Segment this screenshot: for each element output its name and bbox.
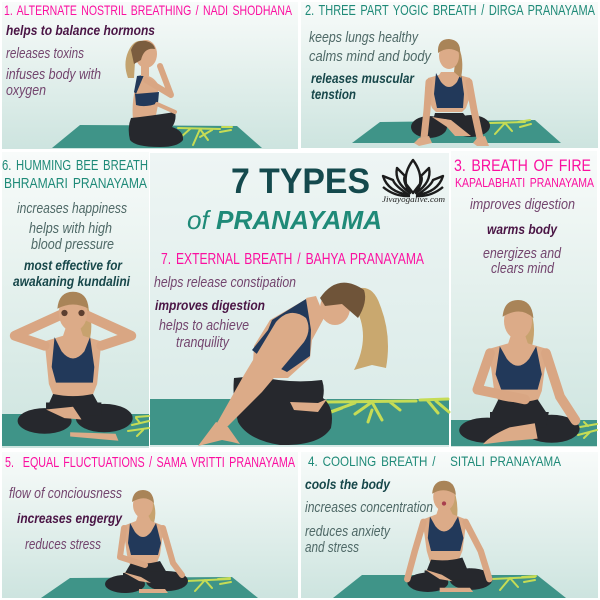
benefit: muscular tension: releases muscular: [311, 70, 415, 86]
yoga mat: [150, 399, 449, 445]
figure: seated, hand on belly: [459, 300, 580, 444]
heading: 5. EQUAL FLUCTUATIONS / SAMA VRITTI PRANAYAMA: [5, 454, 295, 471]
yoga mat: [451, 420, 597, 446]
benefit: digestion: improves digestion: [155, 297, 265, 313]
benefit: toxins: releases toxins: [6, 46, 84, 62]
figure: seated, hands over eyes: [15, 292, 133, 441]
heading: BHRAMARI PRANAYAMA: [4, 175, 147, 192]
heading: 6. HUMMING BEE BREATH: [2, 157, 148, 174]
benefit: lungs: keeps lungs healthy: [309, 30, 419, 46]
benefit: stress: reduces stress: [25, 537, 101, 553]
benefit: oxygen: oxygen: [6, 83, 46, 99]
panel: 2 three part yogic breath: [301, 2, 598, 148]
benefit: blood pressure: helps with high: [29, 221, 112, 237]
benefit: consciousness: flow of conciousness: [9, 486, 122, 502]
benefit: tranquility: helps to achieve: [159, 318, 249, 334]
benefit: constipation: helps release constipation: [154, 275, 296, 291]
benefit: energizes: clears mind: [491, 261, 555, 277]
benefit: anxiety: reduces anxiety: [305, 524, 391, 540]
panel: centre, 7 external breath: [150, 153, 449, 447]
heading: 7. EXTERNAL BREATH / BAHYA PRANAYAMA: [161, 251, 425, 268]
benefit: oxygen: [6, 67, 101, 99]
heading: [454, 156, 595, 190]
panel: 1 alternate nostril breathing: [2, 2, 298, 149]
panel: 5 equal fluctuations: [2, 452, 298, 598]
heading: 1. ALTERNATE NOSTRIL BREATHING / NADI SHODHANA: [4, 2, 292, 18]
benefit: oxygen: infuses body with: [6, 67, 101, 83]
benefit: energizes: [483, 246, 562, 277]
benefit: warms body: warms body: [487, 221, 558, 237]
benefit: concentration: increases concentration: [305, 500, 433, 516]
logo: website: Jivayogalive.com: [382, 194, 445, 204]
benefit: anxiety: [305, 524, 391, 556]
benefit: blood pressure: blood pressure: [31, 237, 114, 253]
yoga mat: [2, 414, 149, 446]
panel: 3 breath of fire: [451, 151, 597, 447]
benefit: tranquility: tranquility: [176, 335, 230, 351]
figure: external breath, bowed forward: [198, 283, 388, 446]
yoga mat: [52, 125, 262, 148]
figure: seated, cooling breath: [407, 481, 493, 592]
benefit: happiness: increases happiness: [17, 201, 127, 217]
benefit: calm: calms mind and body: [309, 49, 432, 65]
benefit: muscular tension: tenstion: [311, 86, 356, 102]
panel: 6 humming bee breath: [2, 152, 149, 448]
benefit: anxiety: and stress: [305, 540, 359, 556]
benefit: tranquility: [159, 318, 249, 351]
subtitle: of pranayama: of PRANAYAMA: [187, 205, 382, 235]
yoga mat: [333, 575, 566, 598]
title: 7 types: 7 TYPES: [231, 162, 370, 201]
benefit: energy: increases engergy: [17, 510, 123, 526]
yoga mat: [41, 577, 258, 598]
figure: seated, head bowed: [411, 39, 490, 146]
benefit: kundalini: most effective for: [24, 257, 123, 273]
benefit: hormones: helps to balance hormons: [6, 22, 155, 38]
benefit: blood pressure: [29, 221, 114, 253]
figure: seated, hand on belly: [105, 490, 188, 593]
figure: side seated, nostril breathing: [125, 40, 183, 147]
panel: 4 cooling breath: [301, 452, 598, 598]
benefit: muscular tension: [311, 70, 415, 102]
yoga mat: [352, 120, 561, 143]
heading: [2, 157, 148, 192]
logo: lotus: [382, 160, 445, 204]
benefit: kundalini: awakaning kundalini: [13, 273, 131, 289]
benefit: kundalini: [13, 257, 131, 289]
benefit: digestion: improves digestion: [470, 197, 575, 213]
benefit: energizes: energizes and: [483, 246, 562, 262]
benefit: cools body: cools the body: [305, 476, 391, 492]
